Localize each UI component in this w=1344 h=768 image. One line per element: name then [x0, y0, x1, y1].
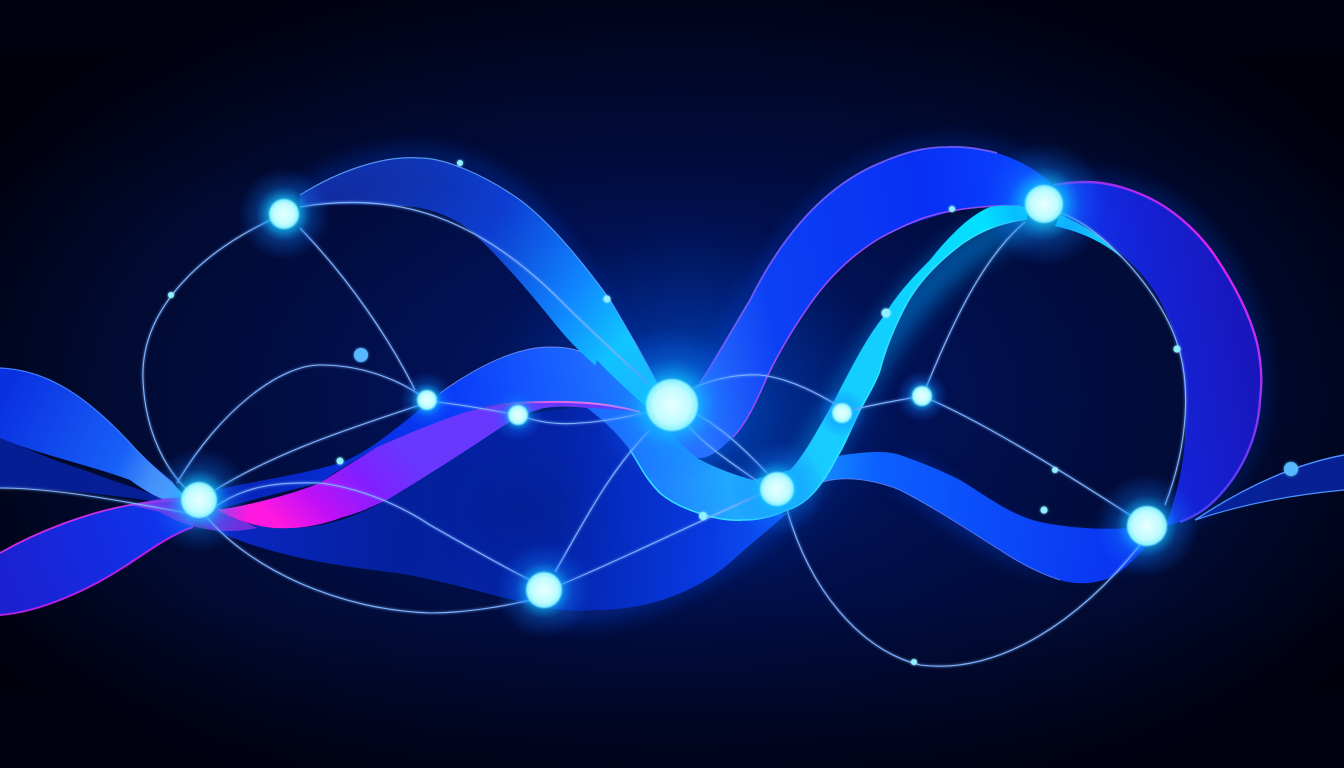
ribbon: bright cyan band [587, 206, 1122, 520]
large glowing nodes [181, 185, 1167, 608]
ribbon: left upper band [0, 368, 199, 508]
ribbon: magenta purple band [130, 402, 640, 531]
ribbon glow halo [300, 147, 1257, 613]
ribbon: lower wide translucent band [193, 408, 787, 611]
node glows [147, 142, 1199, 638]
small satellite nodes [168, 160, 1298, 665]
ribbon: lower right band [703, 452, 1147, 583]
ribbon: left lower band [0, 499, 199, 615]
ribbon: central blue band [215, 347, 645, 510]
ribbon: large right loop [660, 147, 1261, 526]
thin connection lines [0, 202, 1186, 666]
ribbon: right tail [1195, 455, 1344, 520]
ribbon: upper left arc [300, 158, 657, 410]
